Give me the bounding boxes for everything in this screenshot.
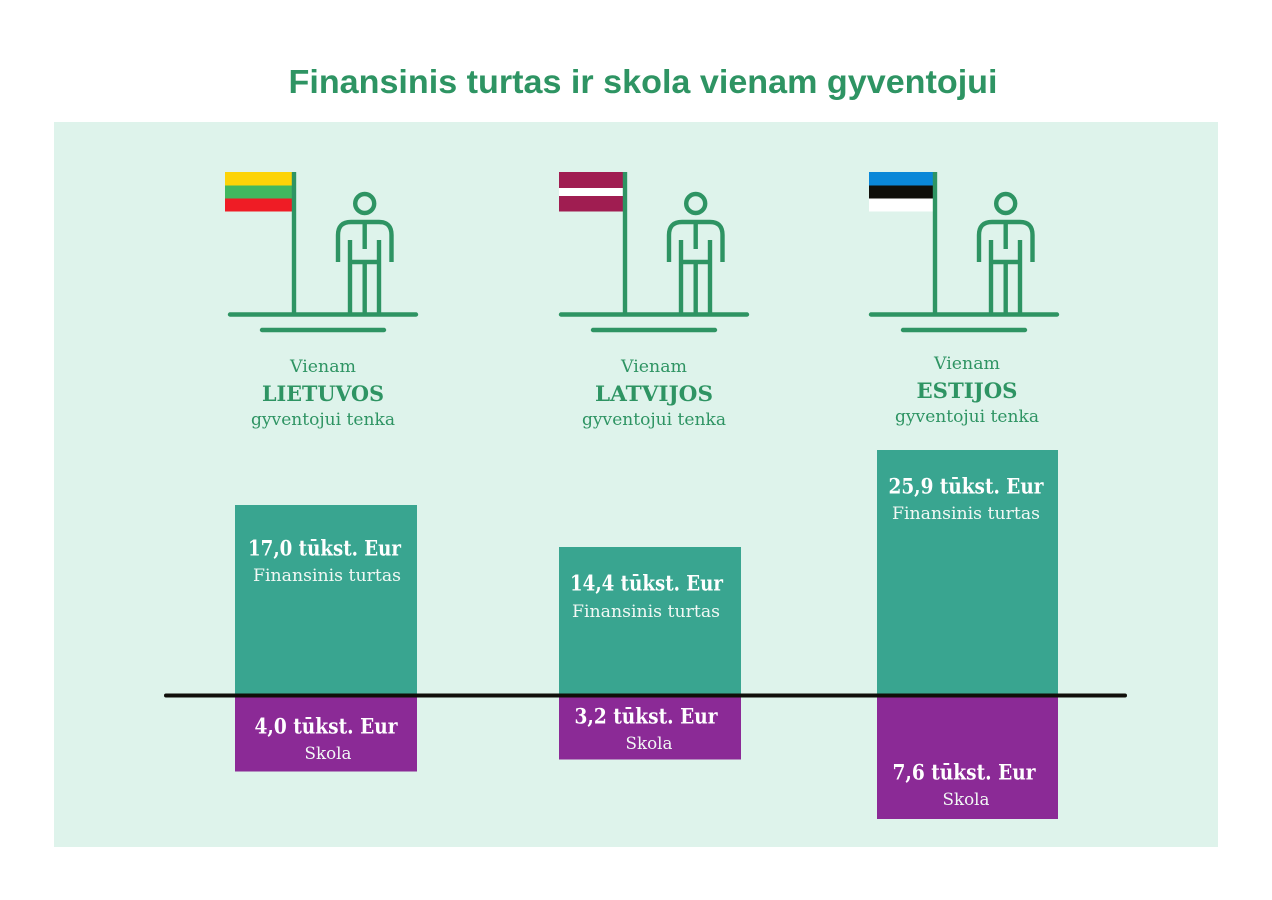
bar label: debt Estonia: 7,6 tūkst. Eur — [892, 760, 1036, 786]
bar label: debt Estonia: Skola — [942, 790, 990, 810]
heading: Lietuvos: gyventojui tenka — [251, 410, 395, 430]
heading: Lietuvos: LIETUVOS — [262, 382, 384, 407]
bar: assets Latvia — [559, 547, 741, 695]
heading: Estijos: Vienam — [933, 354, 1000, 374]
icon: flag of Latvia — [559, 172, 623, 212]
bar label: assets Lithuania — [248, 536, 402, 586]
icon: person with flagpole — [561, 172, 747, 330]
title: Finansinis turtas ir skola vienam gyventojui — [288, 63, 998, 100]
bar: debt Estonia — [877, 695, 1058, 819]
panel: Lithuania — [225, 172, 417, 772]
panel: Estonia — [869, 172, 1058, 819]
heading: Estijos: gyventojui tenka — [895, 407, 1039, 427]
heading: Lietuvos — [251, 357, 395, 430]
panel: Latvia — [559, 172, 747, 760]
axis line — [166, 694, 1125, 698]
bar label: debt Lithuania: 4,0 tūkst. Eur — [254, 714, 398, 740]
bar label: assets Estonia — [888, 474, 1044, 524]
bar: assets Lithuania — [235, 505, 417, 695]
bar label: assets Estonia: Finansinis turtas — [892, 504, 1040, 524]
bar label: assets Latvia: Finansinis turtas — [572, 602, 720, 622]
icon: person with flagpole — [871, 172, 1057, 330]
heading: Estijos — [895, 354, 1039, 427]
heading: Latvijos — [582, 357, 726, 430]
bar: assets Estonia — [877, 450, 1058, 695]
bar label: debt Estonia — [892, 760, 1036, 810]
heading: Estijos: ESTIJOS — [916, 379, 1018, 404]
bar label: assets Lithuania: 17,0 tūkst. Eur — [248, 536, 402, 562]
bar label: assets Lithuania: Finansinis turtas — [253, 566, 401, 586]
heading: Latvijos: gyventojui tenka — [582, 410, 726, 430]
bar label: assets Latvia: 14,4 tūkst. Eur — [570, 572, 724, 596]
bar label: debt Latvia: Skola — [626, 734, 672, 754]
bar: debt Latvia — [559, 695, 741, 760]
panel: background — [54, 122, 1218, 847]
bar: debt Lithuania — [235, 695, 417, 772]
bar label: assets Estonia: 25,9 tūkst. Eur — [888, 474, 1044, 500]
bar label: debt Latvia: 3,2 tūkst. Eur — [574, 704, 718, 730]
icon: person with flagpole — [230, 172, 416, 330]
bar label: debt Lithuania: Skola — [304, 744, 352, 764]
bar label: assets Latvia — [570, 572, 724, 622]
heading: Latvijos: Vienam — [620, 357, 687, 377]
icon: flag of Estonia — [869, 172, 933, 212]
bar label: debt Lithuania — [254, 714, 398, 764]
heading: Lietuvos: Vienam — [289, 357, 356, 377]
heading: Latvijos: LATVIJOS — [595, 382, 713, 407]
icon: flag of Lithuania — [225, 172, 292, 212]
bar label: debt Latvia — [574, 704, 718, 754]
